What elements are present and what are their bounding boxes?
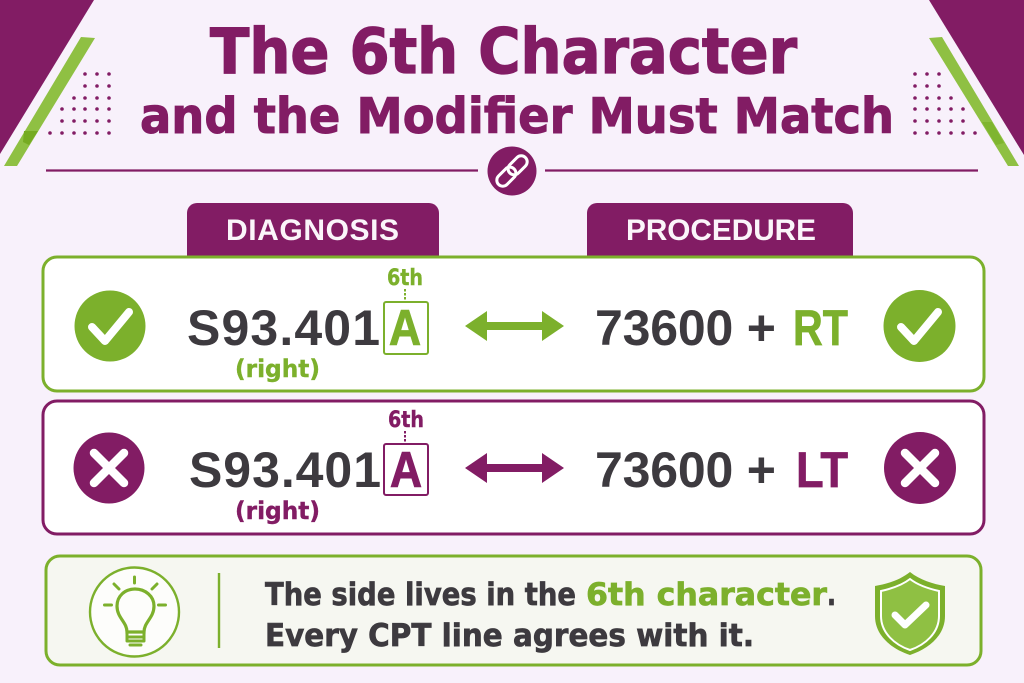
6th character box: 6th (387, 266, 423, 291)
procedure code: 73600 + (595, 442, 776, 498)
6th character box (384, 266, 428, 356)
title: and the Modifier Must Match (140, 88, 894, 145)
double arrow (465, 311, 564, 341)
6th character box: 6th (388, 408, 424, 433)
takeaway text: Every CPT line agrees with it. (265, 618, 754, 654)
title (140, 15, 894, 145)
diagnosis code: S93.401 (189, 442, 381, 498)
icon: cross right (884, 432, 956, 504)
diagnosis code: S93.401 (187, 300, 380, 356)
title divider with link icon (46, 146, 978, 196)
column header: procedure: PROCEDURE (626, 214, 816, 247)
takeaway text: . (827, 577, 836, 613)
panel: matching row (43, 257, 984, 391)
title: The 6th Character (210, 15, 797, 88)
6th character box: A (390, 442, 422, 498)
6th character box: A (389, 300, 421, 356)
double arrow (465, 453, 564, 483)
right note: (right) (235, 355, 320, 383)
6th character box (384, 408, 428, 498)
panel: mismatched row (43, 401, 984, 534)
column header: procedure (587, 203, 853, 256)
divider (218, 573, 220, 648)
icon: light bulb (90, 568, 179, 656)
icon: check right (884, 290, 956, 362)
panel: takeaway (46, 556, 981, 665)
corner decoration: top left (0, 0, 111, 166)
icon: shield with check (875, 572, 945, 655)
takeaway text: The side lives in the (265, 577, 576, 613)
icon: cross left (74, 432, 144, 504)
modifier RT: RT (793, 300, 848, 356)
icon: check left (74, 290, 146, 362)
right note: (right) (235, 497, 320, 525)
column header: diagnosis (187, 203, 439, 256)
takeaway text: 6th character (586, 577, 828, 613)
modifier LT: LT (796, 442, 848, 498)
column header: diagnosis: DIAGNOSIS (226, 214, 399, 247)
corner decoration: top right (913, 0, 1024, 166)
procedure code: 73600 + (595, 300, 776, 356)
takeaway text (265, 577, 836, 654)
